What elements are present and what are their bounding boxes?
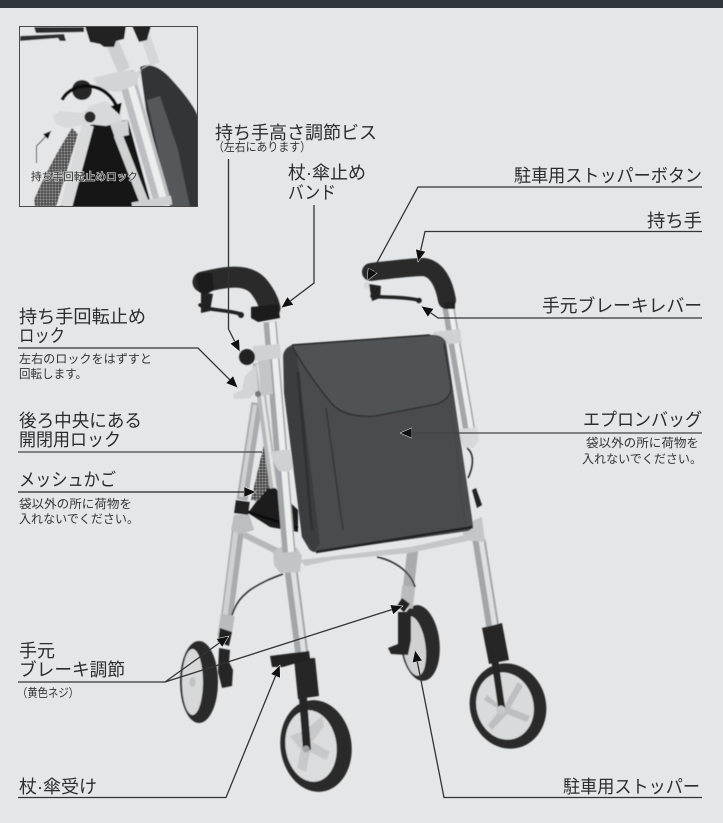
front left wheel [274,696,358,796]
label: handle height screw [213,123,377,352]
rear left wheel [180,641,233,723]
label: handle [418,211,702,262]
mesh basket [248,440,298,532]
rear legs [217,403,415,646]
label: rear center folding lock: 後ろ中央にある [19,411,142,431]
label: hand brake adjuster: 手元 [19,641,55,661]
label: handle rotation lock: 持ち手回転止め [19,307,146,327]
label: mesh basket: 袋以外の所に荷物を [19,497,132,511]
label: mesh basket: メッシュかご [19,470,116,490]
label: rear center folding lock [18,411,262,452]
label: hand brake adjuster [17,606,403,700]
icon: rotation arrow [62,86,118,110]
left frame tube and clamps [233,322,295,552]
front right wheel [460,655,556,757]
label: handle rotation lock: 回転します。 [19,367,87,381]
label: apron bag [400,410,702,466]
label: parking stopper button: 駐車用ストッパーボタン [514,166,702,186]
label: apron bag: 袋以外の所に荷物を [586,436,699,450]
label: hand brake lever [421,295,702,318]
label: handle rotation lock: 左右のロックをはずすと [19,351,152,366]
walker illustration [180,267,556,796]
fork blocks [270,623,509,699]
left handle [196,273,270,318]
rear right wheel [388,603,443,683]
label: cane and umbrella band [281,163,366,308]
label: apron bag: 入れないでください。 [582,452,702,466]
front legs [291,540,495,655]
label: handle height screw: （左右にあります） [213,139,311,154]
apron bag [283,335,473,552]
brake cables [232,574,283,615]
label: cane and umbrella holder: 杖·傘受け [19,777,97,797]
label: hand brake adjuster: （黄色ネジ） [17,686,79,700]
umbrella band [251,304,280,322]
label: mesh basket: 入れないでください。 [19,512,139,526]
label: parking stopper [415,650,702,798]
label: handle rotation lock [18,307,238,388]
label: apron bag: エプロンバッグ [583,410,702,430]
label: cane and umbrella band: 杖·傘止め [288,163,366,183]
label: hand brake lever: 手元ブレーキレバー [542,295,702,316]
right handle [364,267,455,309]
frame joints and base bar [231,500,485,573]
label: parking stopper button [367,166,702,281]
label: handle height screw: 持ち手高さ調節ビス [215,123,377,143]
top bar [0,0,723,8]
label: rear center folding lock: 開閉用ロック [19,430,121,450]
label: cane and umbrella holder [18,665,280,798]
label: hand brake adjuster: ブレーキ調節 [19,659,125,680]
label: mesh basket [18,470,256,526]
right frame tube and clamps [433,305,482,508]
label: parking stopper: 駐車用ストッパー [563,777,700,797]
label: cane and umbrella band: バンド [288,183,336,203]
inset caption: 持ち手回転止めロック [31,170,138,183]
panel: inset detail of handle rotation lock [19,26,198,211]
label: handle rotation lock: ロック [19,326,65,346]
arrow to lock [36,131,51,163]
label: handle: 持ち手 [647,211,702,231]
